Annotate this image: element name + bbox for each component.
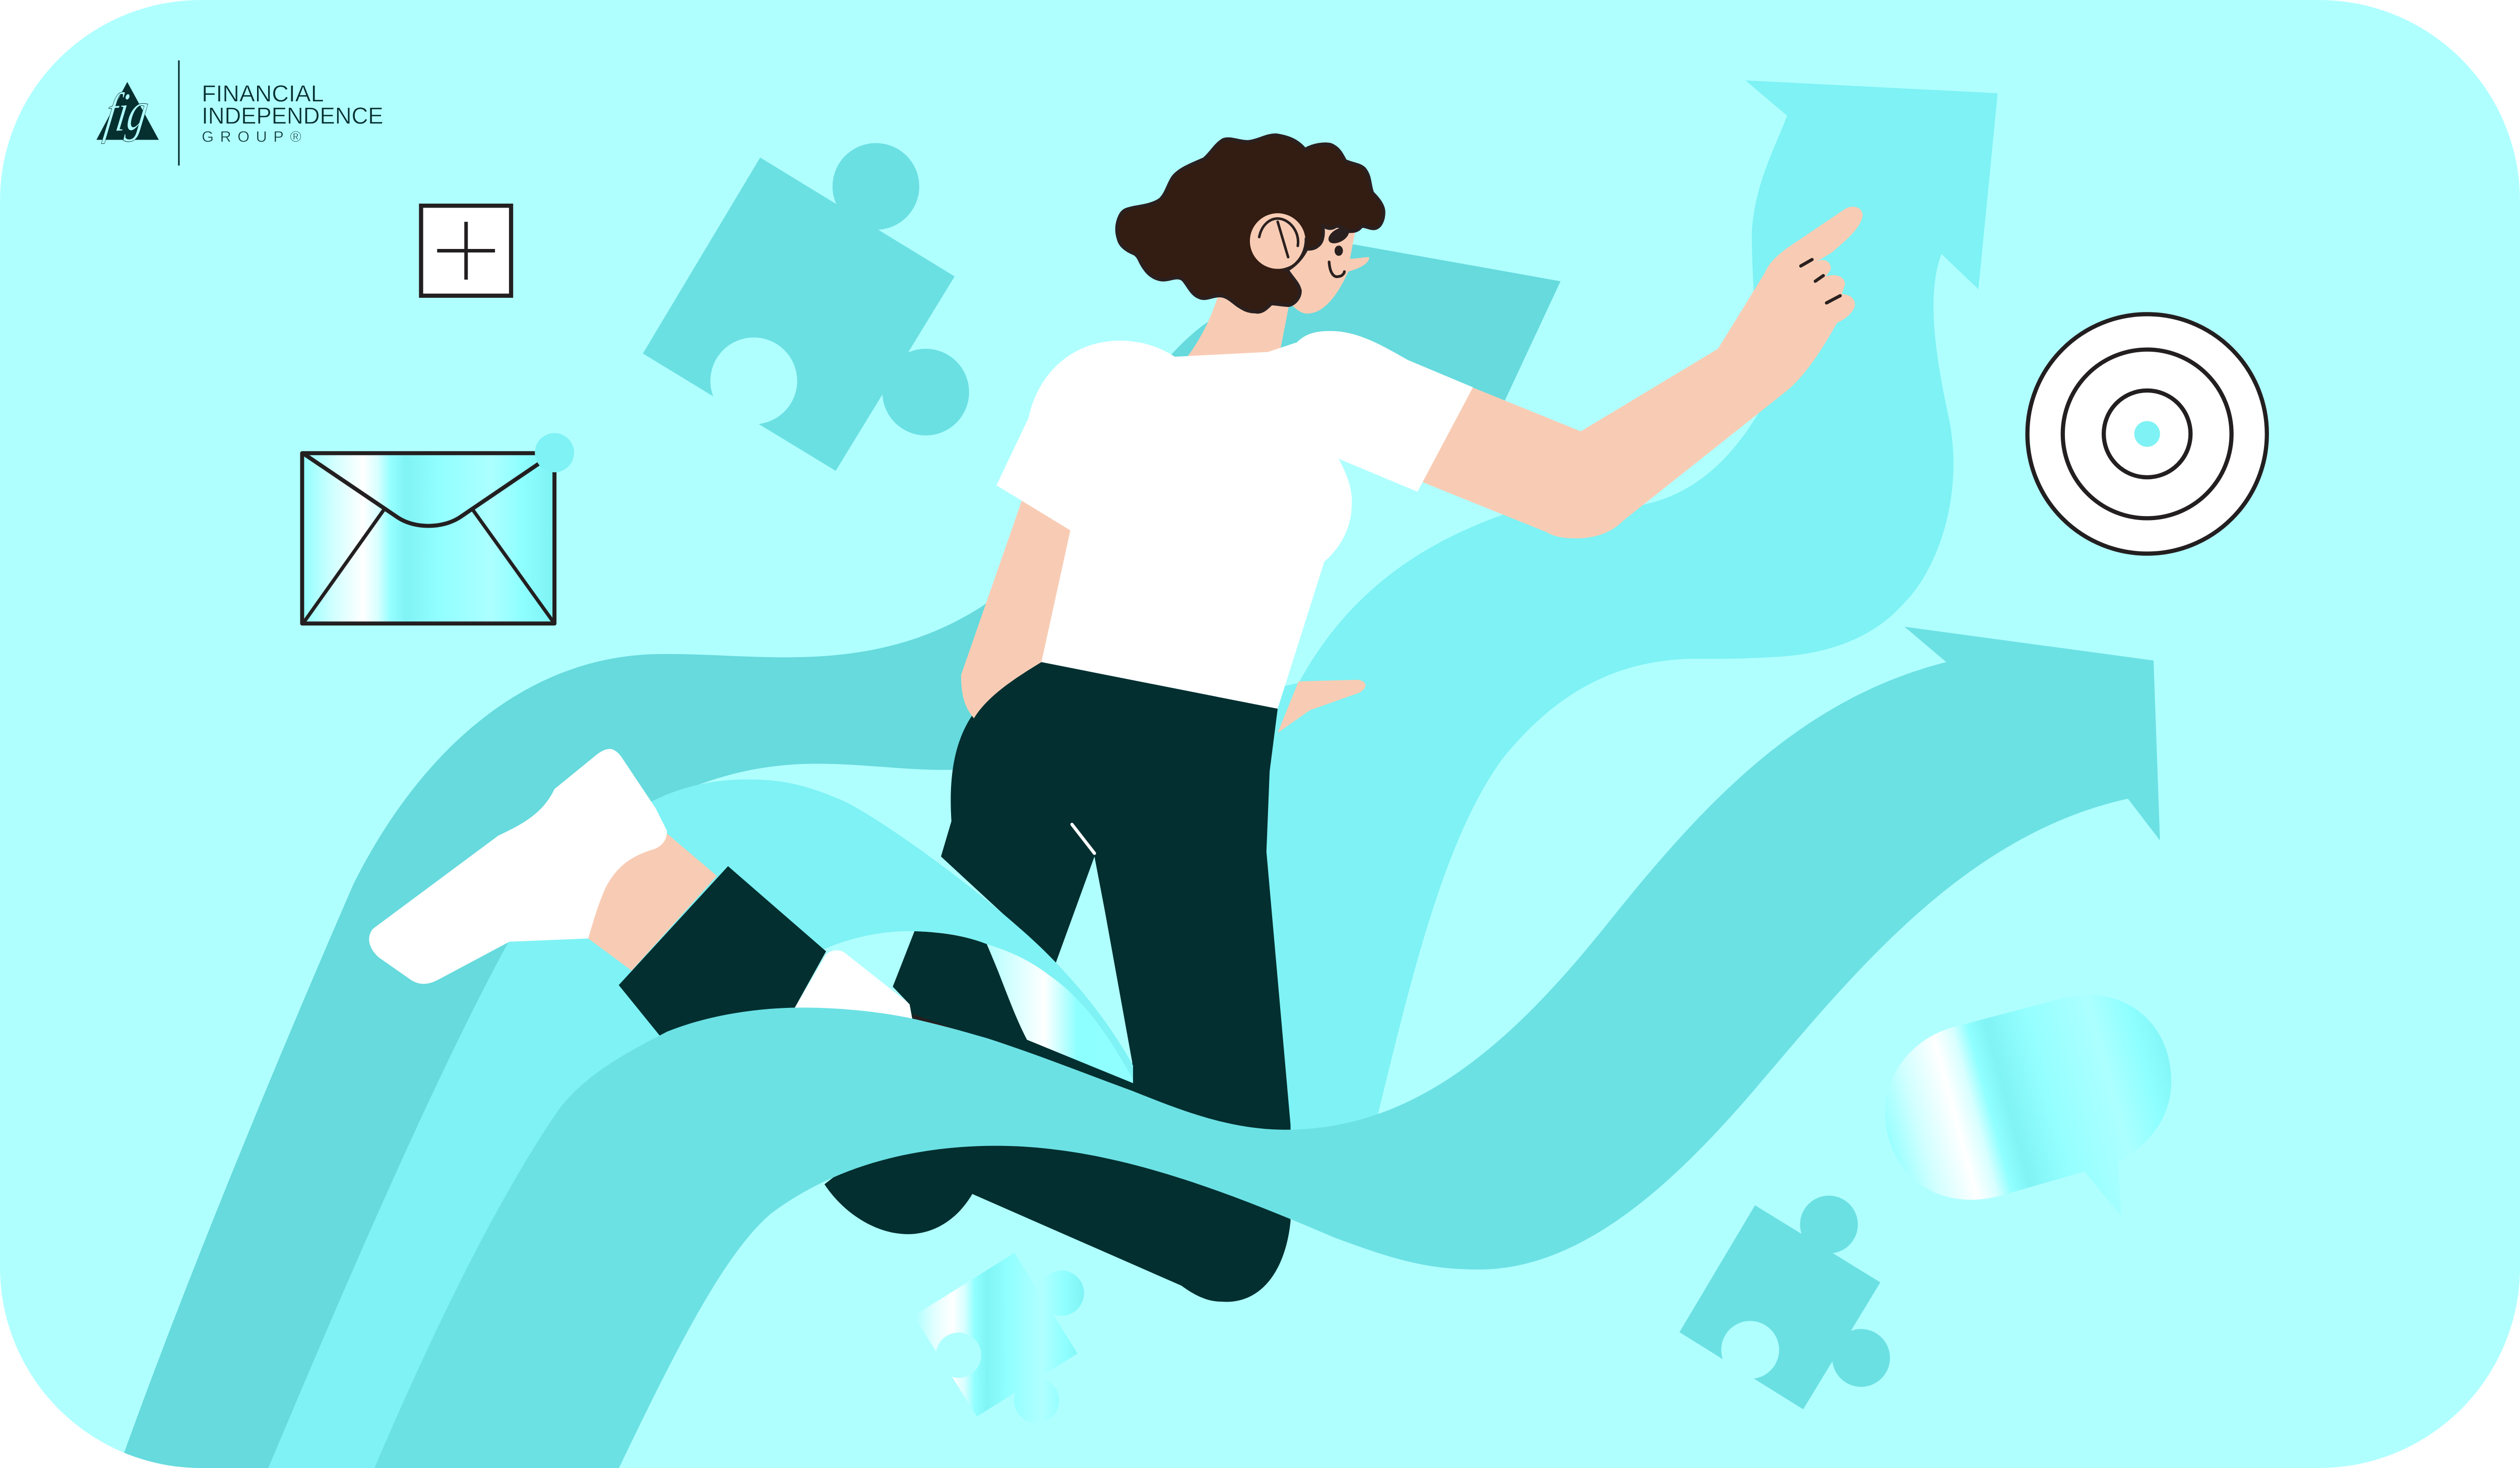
wordmark line 1: FINANCIAL [202, 81, 324, 107]
target bullseye [2134, 421, 2160, 447]
puzzle knob right [883, 349, 969, 435]
icon: envelope [302, 433, 574, 623]
knuckle line 1 [1801, 260, 1812, 266]
wordmark line 2: INDEPENDENCE [202, 103, 384, 129]
figure: ear [1250, 213, 1306, 270]
puzzle body [914, 1253, 1078, 1417]
figure: trouser crease highlight [1072, 824, 1095, 853]
figure: white shirt [996, 331, 1473, 709]
icon: speech bubble [1885, 995, 2171, 1217]
illustration clipped to card [109, 80, 2160, 1468]
puzzle body [643, 158, 955, 471]
envelope body [302, 453, 554, 623]
figure: right arm and hand [1422, 207, 1863, 538]
logo wordmark [202, 81, 384, 146]
target middle ring [2063, 350, 2232, 518]
logo: Financial Independence Group [96, 60, 384, 165]
knuckle line 2 [1815, 276, 1823, 281]
shadow strip [913, 1014, 976, 1037]
plus sign [437, 222, 495, 280]
puzzle knob bottom [1014, 1378, 1059, 1423]
arrow: upper right ribbon [1262, 80, 1998, 1173]
envelope fold right [473, 509, 554, 623]
puzzle knob top [833, 143, 919, 230]
wordmark line 3: GROUP® [202, 129, 301, 146]
puzzle knob right [1832, 1329, 1890, 1387]
ear inner line [1278, 222, 1288, 257]
figure: eye [1335, 245, 1343, 256]
knuckle line 3 [1826, 296, 1840, 303]
figure: trousers main [825, 662, 1291, 1302]
target inner ring [2104, 391, 2190, 477]
icon: holographic puzzle piece [914, 1253, 1084, 1423]
ear lobe [1250, 213, 1305, 269]
arrow: front ribbon [363, 627, 2160, 1468]
target outer ring [2028, 314, 2267, 554]
puzzle socket [936, 1332, 981, 1378]
icon: target [2028, 314, 2267, 554]
shoe [369, 749, 667, 984]
arrow: middle ribbon [257, 780, 1133, 1468]
notification dot [535, 433, 574, 472]
icon: plus box [421, 206, 511, 296]
plus box frame [421, 206, 511, 296]
envelope flap [302, 453, 540, 526]
sock [795, 950, 912, 1019]
ear outer arc [1283, 238, 1306, 270]
icon: small puzzle piece [1679, 1195, 1890, 1410]
figure: neck [1186, 289, 1291, 358]
figure: finger marks [1801, 260, 1840, 303]
holographic shin panel [987, 944, 1133, 1083]
logo fig script: fig [101, 80, 153, 144]
puzzle body [1679, 1205, 1880, 1410]
logo triangle mark [96, 82, 159, 140]
shin trousers [619, 866, 826, 1045]
puzzle socket [1721, 1321, 1779, 1379]
figure: hair [1117, 135, 1384, 312]
puzzle knob top [1800, 1195, 1858, 1253]
arrow: back ribbon [109, 244, 1560, 1468]
envelope frame [302, 453, 554, 623]
figure: smile [1329, 262, 1344, 277]
icon: large puzzle piece [643, 143, 969, 471]
figure: eyebrow [1326, 224, 1352, 246]
puzzle knob right [1039, 1270, 1084, 1316]
logo divider [178, 60, 179, 165]
lower shin trousers [893, 931, 1133, 1091]
figure: face [1286, 193, 1369, 313]
puzzle socket [710, 338, 797, 424]
ear inner arc [1259, 219, 1298, 246]
envelope fold left [303, 509, 384, 623]
figure: hand behind back [1278, 680, 1365, 733]
figure: bent leg [369, 749, 1133, 1117]
figure: left arm [961, 495, 1074, 718]
calf skin [588, 827, 717, 971]
